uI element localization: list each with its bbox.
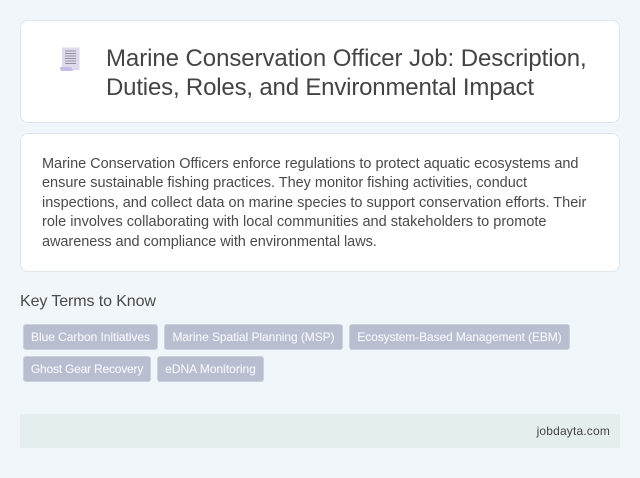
tag: eDNA Monitoring [165,362,256,376]
title: Marine Conservation Officer Job: Description, [106,45,587,72]
tag [164,324,343,350]
description text: ensure sustainable fishing practices. They monitor fishing activities, conduct [42,175,527,191]
tags: key terms [23,324,570,382]
title [106,45,587,101]
tag: Blue Carbon Initiatives [31,330,150,344]
description text: inspections, and collect data on marine species to support conservation efforts. Their [42,194,586,210]
icon: document scroll [60,47,80,71]
heading: key terms: Key Terms to Know [20,293,156,310]
tag: Ghost Gear Recovery [31,362,143,376]
panel: description card [20,133,620,272]
tag: Marine Spatial Planning (MSP) [172,330,335,344]
tag [349,324,570,350]
description text: role involves collaborating with local communities and stakeholders to promote [42,214,547,230]
tag [157,356,264,382]
tag [23,324,158,350]
panel: title card [20,20,620,123]
description text [42,156,586,250]
footer text: jobdayta.com [537,424,610,438]
tag [23,356,151,382]
tag: Ecosystem-Based Management (EBM) [357,330,562,344]
description text: awareness and compliance with environmental laws. [42,234,377,250]
footer bar [20,414,620,448]
description text: Marine Conservation Officers enforce regulations to protect aquatic ecosystems and [42,156,578,172]
title: Duties, Roles, and Environmental Impact [106,74,534,101]
